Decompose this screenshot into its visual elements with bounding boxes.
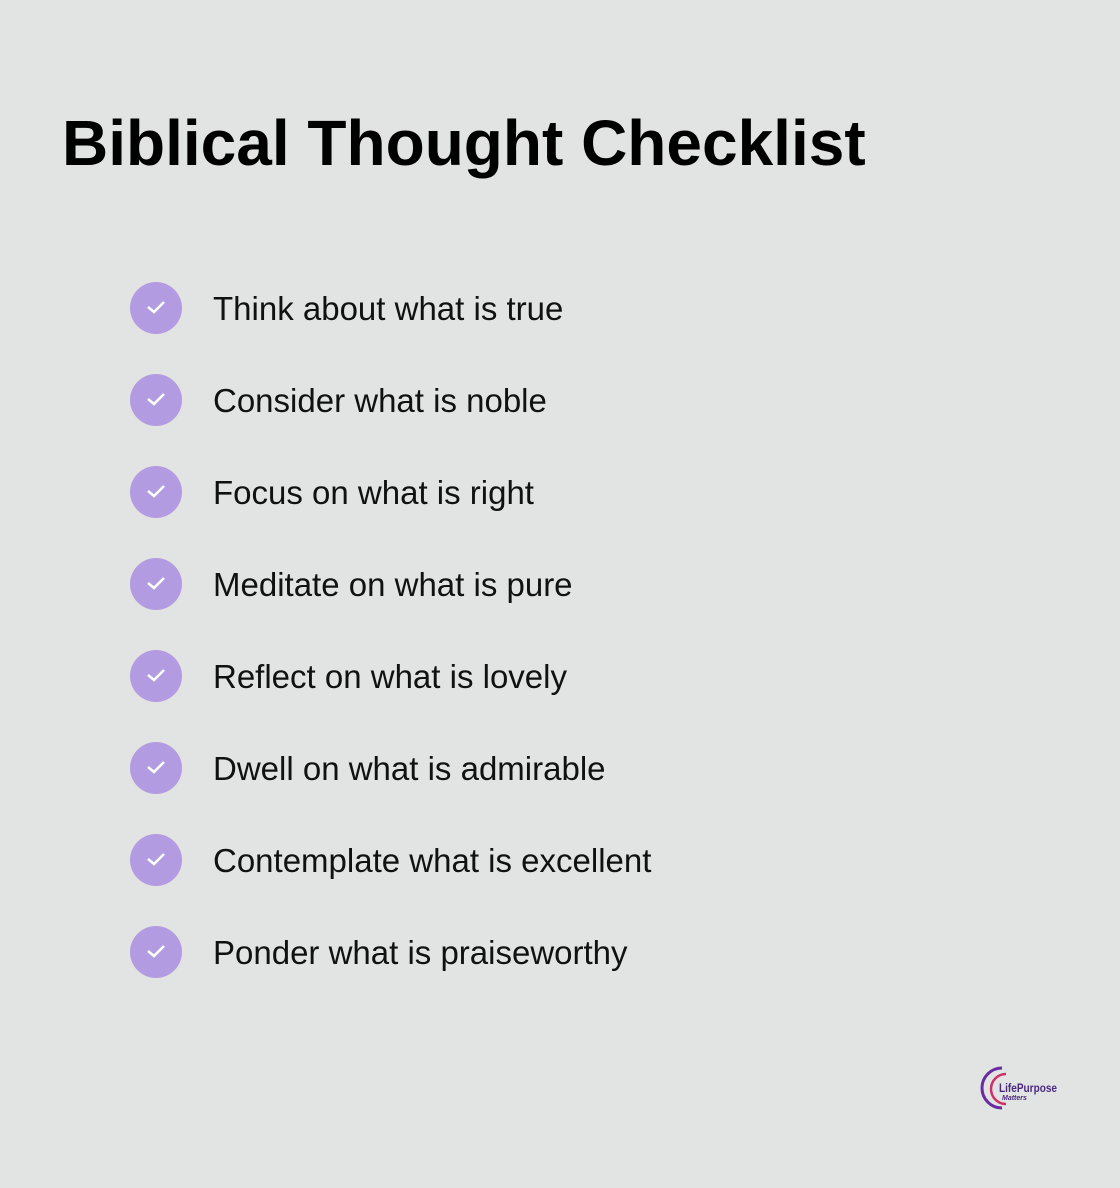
logo: Matters [1002, 1095, 1027, 1102]
item 6 [130, 742, 606, 794]
item 2 [130, 374, 547, 426]
item 4 [130, 558, 573, 610]
item 5 [130, 650, 567, 702]
item 7 [130, 834, 652, 886]
item 7: Contemplate what is excellent [213, 842, 651, 879]
item 6: Dwell on what is admirable [213, 750, 606, 787]
item 4: Meditate on what is pure [213, 566, 573, 603]
item 5: Reflect on what is lovely [213, 658, 567, 695]
item 3 [130, 466, 534, 518]
item 1: Think about what is true [213, 290, 563, 327]
item 2: Consider what is noble [213, 382, 547, 419]
item 8: Ponder what is praiseworthy [213, 934, 628, 971]
item 1 [130, 282, 563, 334]
item 3: Focus on what is right [213, 474, 534, 511]
logo [980, 1066, 1057, 1110]
title: Biblical Thought Checklist [62, 107, 866, 179]
item 8 [130, 926, 628, 978]
